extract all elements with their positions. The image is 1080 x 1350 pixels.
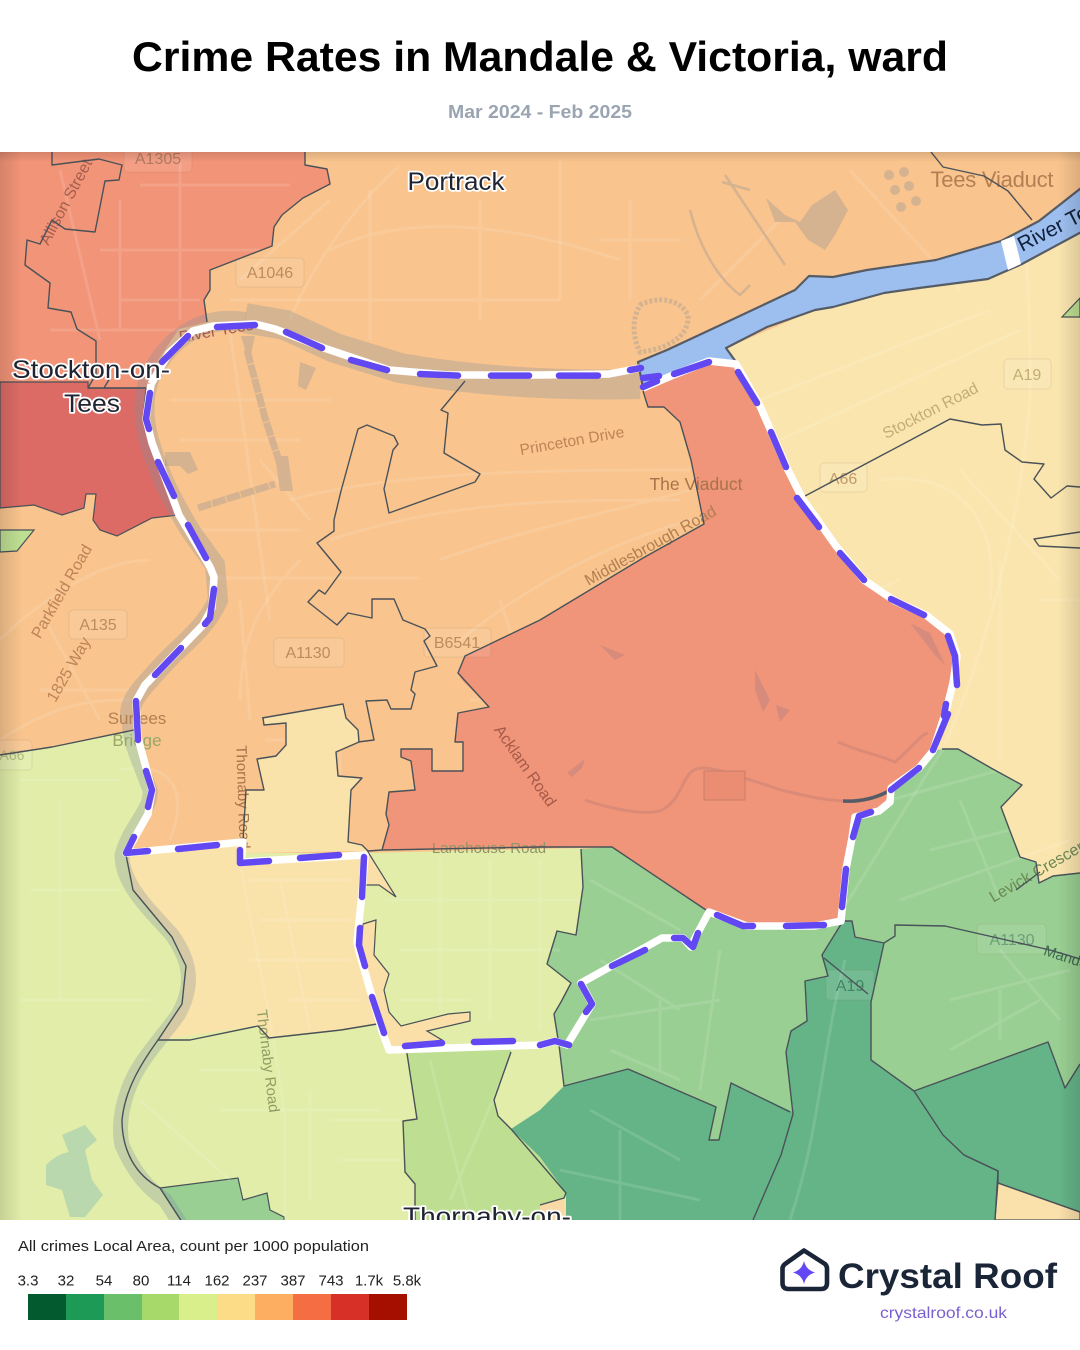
River Tees band	[120, 318, 640, 1226]
faint street network	[0, 160, 1080, 1220]
legend tick labels: 5.8k	[393, 1272, 422, 1290]
road labels: A19	[836, 978, 864, 995]
area: dark green south-west	[511, 1069, 793, 1220]
stream dark section	[843, 792, 887, 801]
road labels: Allison Street	[37, 156, 96, 248]
area: dark green central	[753, 921, 998, 1220]
road labels: Thornaby Road	[232, 745, 253, 849]
area: cream south-east corner	[995, 1183, 1080, 1220]
area: mid green south-east	[843, 749, 1080, 1091]
area: salmon ward	[382, 361, 957, 926]
road labels: A1046	[247, 265, 293, 282]
road labels: A135	[79, 617, 117, 634]
industrial features	[165, 167, 921, 491]
legend tick labels: 1.7k	[355, 1272, 384, 1290]
title: Crime Rates in Mandale & Victoria, ward	[132, 33, 948, 80]
legend tick labels: 114	[167, 1272, 191, 1290]
legend title: All crimes Local Area, count per 1000 population	[18, 1238, 369, 1255]
legend tick labels: 387	[280, 1272, 306, 1290]
rail viaduct tracks	[198, 350, 282, 508]
website address: crystalroof.co.uk	[880, 1305, 1008, 1322]
map edge shading	[0, 152, 1080, 1220]
area: salmon town centre	[0, 152, 330, 388]
area: mid green south	[547, 847, 841, 1140]
road labels: Stockton Road	[880, 380, 981, 443]
road labels: Tees Viaduct	[930, 167, 1054, 192]
legend tick labels: 80	[133, 1272, 149, 1290]
place labels	[12, 168, 571, 1231]
road number badges	[0, 145, 1051, 1000]
white boundary line	[126, 324, 957, 1050]
place labels: Portrack	[408, 168, 505, 196]
boundary lines	[0, 152, 1080, 1222]
ward features: building	[704, 771, 745, 800]
ward boundary	[126, 324, 957, 1050]
place labels: Thornaby-on-	[403, 1203, 571, 1231]
legend tick labels: 3.3	[18, 1272, 38, 1290]
purple dashes	[126, 325, 957, 1046]
legend	[18, 1238, 422, 1320]
area: dark green south-east	[914, 1042, 1080, 1212]
road labels: Lanehouse Road	[432, 840, 546, 857]
area: cream patch bottom	[540, 1198, 566, 1220]
road labels	[0, 151, 1080, 1113]
legend tick labels: 32	[58, 1272, 74, 1290]
wordmark: Crystal Roof	[838, 1257, 1057, 1296]
area: light green Thornaby south	[403, 1047, 566, 1220]
road labels: Middlesbrough Road	[582, 503, 719, 590]
road labels: A1130	[285, 645, 331, 662]
road labels: Parkfield Road	[29, 542, 96, 641]
icon: house with star	[782, 1250, 827, 1289]
road labels: B6541	[434, 635, 480, 652]
road labels: A19	[1013, 367, 1041, 384]
area: cream east	[726, 233, 1080, 883]
area: small green north-east	[1062, 298, 1080, 317]
ward features: stream and lake edge	[585, 733, 928, 812]
road labels: Thornaby Road	[253, 1009, 282, 1113]
subtitle: date range: Mar 2024 - Feb 2025	[448, 102, 632, 122]
road labels: The Viaduct	[649, 474, 743, 494]
area: pale green south-west	[0, 730, 600, 1220]
road labels: Surtees	[108, 709, 166, 728]
road labels: Bridge	[112, 731, 162, 750]
road labels: A66	[0, 747, 25, 763]
area: small green south-west	[160, 1178, 284, 1222]
ponds	[46, 1125, 103, 1217]
River Tees water	[638, 185, 1080, 388]
place labels: Tees	[64, 390, 120, 418]
legend tick labels: 162	[204, 1272, 230, 1290]
legend tick labels: 237	[242, 1272, 268, 1290]
road labels: 1825 Way	[44, 635, 95, 705]
legend tick labels: 743	[318, 1272, 344, 1290]
road labels: River Tees	[178, 317, 255, 346]
road labels: A1305	[135, 151, 181, 168]
area: small green west	[0, 530, 34, 552]
legend tick labels: 54	[96, 1272, 112, 1290]
area: cream strips beside ward	[360, 852, 470, 1050]
road labels: Princeton Drive	[518, 424, 626, 459]
legend tick labels	[18, 1272, 422, 1290]
River Tees white gap	[1001, 236, 1021, 270]
legend colour scale	[28, 1294, 407, 1320]
place labels: Stockton-on-	[12, 356, 170, 384]
rail and dock outlines	[690, 175, 785, 295]
area: cream ward block	[243, 704, 368, 853]
road labels: Acklam Road	[490, 722, 559, 810]
ward features: ponds	[567, 623, 945, 777]
area: cream Thornaby north	[126, 842, 382, 1040]
area: dark red Stockton centre	[0, 382, 179, 536]
logo: Crystal Roof	[782, 1250, 1057, 1322]
road labels: A1130	[989, 932, 1035, 949]
road labels: A66	[829, 471, 857, 488]
